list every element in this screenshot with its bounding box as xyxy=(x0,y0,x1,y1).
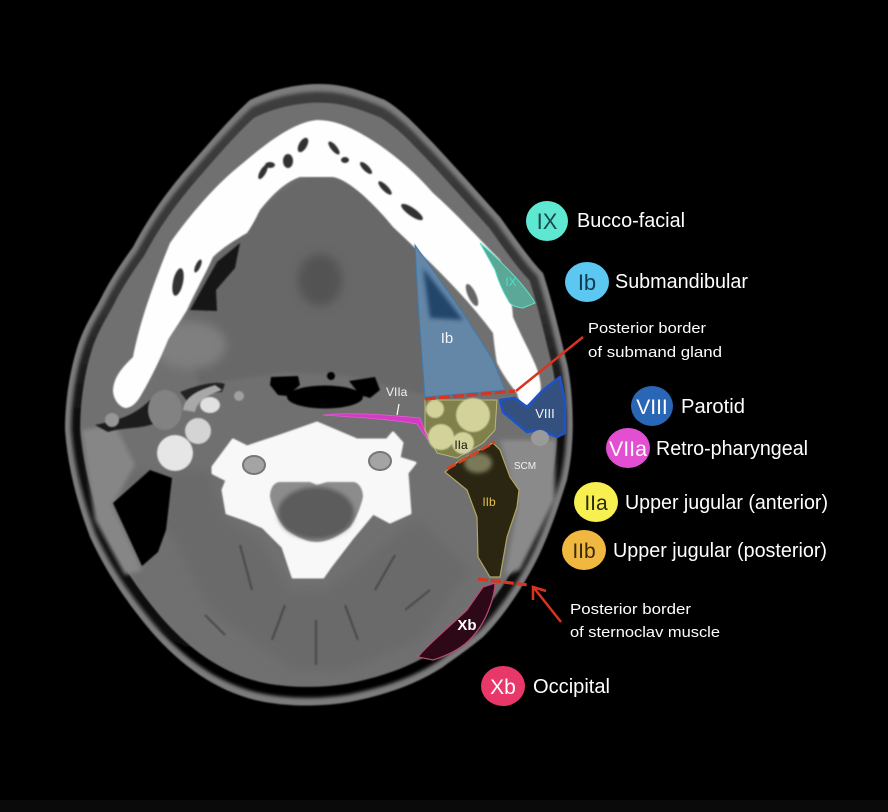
label VIIa: VIIa xyxy=(386,385,408,399)
right side fat of floor of mouth xyxy=(190,243,240,311)
axial CT scan of the neck xyxy=(65,84,573,706)
node below parotid xyxy=(531,430,549,446)
red dashed posterior border of submandibular gland xyxy=(425,391,515,399)
right side gray muscle xyxy=(82,425,142,575)
legend: VIII Parotid xyxy=(631,386,745,426)
tongue and floor of mouth xyxy=(180,175,430,395)
callout: submandibular gland border: Posterior border xyxy=(588,321,706,337)
callout: sternoclav muscle border xyxy=(570,602,720,641)
mid tongue shadow xyxy=(298,254,342,306)
legend: Xb Occipital: Xb xyxy=(490,676,516,699)
vertebral foramina xyxy=(243,456,265,474)
label SCM: SCM xyxy=(514,461,536,472)
spinal canal xyxy=(270,482,363,542)
legend: IX Bucco-facial: IX xyxy=(537,209,558,234)
sternomastoid muscle xyxy=(500,440,555,575)
level IIb contour xyxy=(445,443,519,577)
level Xb contour xyxy=(418,583,495,660)
legend: IIb Upper jugular (posterior) xyxy=(562,530,827,570)
legend: VIIa Retro-pharyngeal: Retro-pharyngeal xyxy=(656,438,808,460)
spinal cord xyxy=(278,487,354,539)
legend: IIb Upper jugular (posterior): IIb xyxy=(572,540,596,563)
level Ib contour xyxy=(415,245,505,397)
level VIIa contour xyxy=(323,385,428,440)
red dashed posterior border of sternocleidomastoid xyxy=(478,579,528,585)
level IIa contour xyxy=(425,398,497,458)
label Ib: Ib xyxy=(441,330,453,347)
muscle furrows xyxy=(205,545,430,665)
dark submandibular fat xyxy=(423,268,463,320)
mandible xyxy=(113,120,541,408)
lymph nodes and vessels xyxy=(426,398,490,454)
label IX: IX xyxy=(505,275,517,289)
parotid fat gap xyxy=(113,470,172,566)
legend: Ib Submandibular: Ib xyxy=(578,270,596,295)
occipital muscles xyxy=(110,470,470,672)
callout: sternoclav muscle border: of sternoclav muscle xyxy=(570,625,720,641)
label Xb: Xb xyxy=(457,617,477,634)
callout: submandibular gland border: of submand gland xyxy=(588,345,722,361)
vessels xyxy=(105,385,244,471)
legend: VIIa Retro-pharyngeal: VIIa xyxy=(609,438,647,461)
label IIa: IIa xyxy=(454,438,468,452)
subcutaneous fat layer xyxy=(71,92,566,698)
legend: IX Bucco-facial xyxy=(526,201,685,241)
legend: IIa Upper jugular (anterior): IIa xyxy=(584,492,608,515)
legend: Xb Occipital xyxy=(481,666,610,706)
legend: IIa Upper jugular (anterior): Upper jugular (anterior) xyxy=(625,492,828,514)
level IX contour xyxy=(480,243,535,308)
label VIII: VIII xyxy=(535,406,555,421)
left neck lighter glandular tissue xyxy=(154,321,226,369)
vessels in IIb xyxy=(464,453,492,473)
legend: IIb Upper jugular (posterior): Upper jugular (posterior) xyxy=(613,540,827,562)
arrow line to submandibular gland border xyxy=(516,337,583,391)
legend: VIIa Retro-pharyngeal xyxy=(606,428,808,468)
legend: Ib Submandibular: Submandibular xyxy=(615,271,748,293)
legend: VIII Parotid: Parotid xyxy=(681,396,745,418)
airway xyxy=(270,372,380,408)
level VIII contour xyxy=(500,377,565,446)
legend: IIa Upper jugular (anterior) xyxy=(574,482,828,522)
pointer to VIIa xyxy=(397,404,399,415)
callout: sternoclav muscle border: Posterior border xyxy=(570,602,691,618)
skin outline of the head xyxy=(65,84,573,706)
mandible marrow xyxy=(170,136,481,308)
label IIb: IIb xyxy=(482,495,496,509)
fat below mandible xyxy=(95,400,168,432)
legend: Ib Submandibular xyxy=(565,262,748,302)
cervical vertebra xyxy=(213,423,415,577)
legend: IX Bucco-facial: Bucco-facial xyxy=(577,210,685,232)
legend: Xb Occipital: Occipital xyxy=(533,676,610,698)
callout: submandibular gland border xyxy=(588,321,722,361)
arrow to sternocleidomastoid border xyxy=(533,587,561,622)
soft tissue xyxy=(80,103,557,687)
red dashed border between IIa and IIb xyxy=(447,442,495,469)
legend: VIII Parotid: VIII xyxy=(636,396,668,419)
